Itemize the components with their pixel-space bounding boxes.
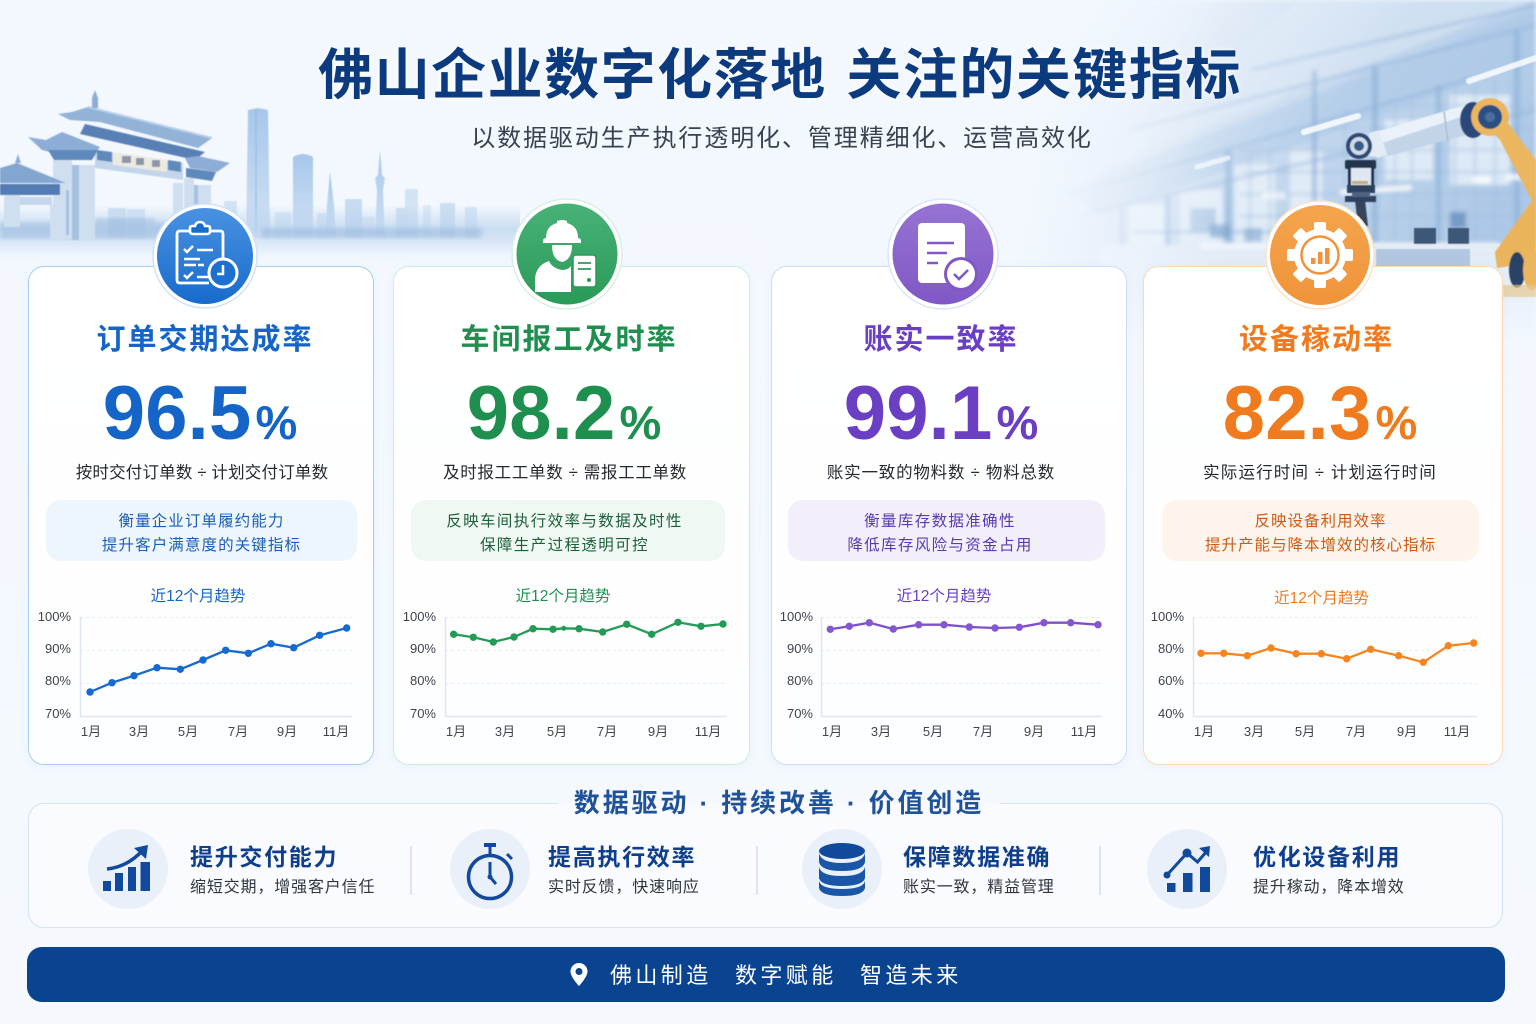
heading: 账实一致率: [863, 324, 1019, 356]
slogan: 数字赋能: [735, 963, 837, 988]
description callout: 提升产能与降本增效的核心指标: [1205, 536, 1436, 554]
line chart: workshop reporting trend: 100%: [403, 609, 436, 624]
line chart: inventory accuracy trend: 1月: [822, 724, 842, 739]
panel: equipment availability rate: [1143, 200, 1503, 765]
Foshan skyline silhouette: [108, 108, 477, 239]
line chart: equipment availability trend: 40%: [1158, 706, 1184, 721]
line chart: order delivery trend: 100%: [38, 609, 71, 624]
factory hall background: [1072, 0, 1536, 308]
metric value: 96.5%: [103, 371, 297, 456]
line chart: workshop reporting trend: 70%: [410, 706, 436, 721]
chart title: 近12个月趋势: [897, 588, 991, 605]
line chart: order delivery trend: 90%: [45, 641, 71, 656]
panel: value summary: [28, 803, 1503, 928]
summary heading: 数据驱动 · 持续改善 · 价值创造: [574, 788, 984, 818]
icon: location pin: [570, 963, 588, 986]
benefit: delivery capability: 缩短交期，增强客户信任: [190, 879, 375, 896]
line chart: workshop reporting trend: 90%: [410, 641, 436, 656]
line chart: inventory accuracy trend: 5月: [923, 724, 943, 739]
line chart: workshop reporting trend: 1月: [446, 724, 466, 739]
line chart: workshop reporting trend: 80%: [410, 673, 436, 688]
line chart: order delivery trend: 3月: [129, 724, 149, 739]
icon: gear with bars: [1265, 200, 1375, 310]
description callout: 反映车间执行效率与数据及时性: [446, 513, 683, 530]
line chart: inventory accuracy trend: 3月: [871, 724, 891, 739]
benefit: delivery capability: [88, 829, 375, 909]
description callout: [1162, 500, 1479, 561]
line chart: inventory accuracy trend: 70%: [787, 706, 813, 721]
line chart: equipment availability trend: 80%: [1158, 641, 1184, 656]
line chart: inventory accuracy trend: 100%: [780, 609, 813, 624]
Foshan memorial archway: [0, 90, 230, 240]
chart title: 近12个月趋势: [151, 588, 245, 605]
icon: database: [802, 829, 882, 909]
slogan: 佛山制造: [610, 963, 712, 988]
description callout: 衡量库存数据准确性: [864, 513, 1016, 530]
description callout: 提升客户满意度的关键指标: [102, 536, 301, 554]
subtitle: 以数据驱动生产执行透明化、管理精细化、运营高效化: [471, 125, 1093, 152]
line chart: workshop reporting trend: 7月: [597, 724, 617, 739]
benefit: equipment utilization: 提升稼动，降本增效: [1253, 879, 1405, 896]
description callout: 保障生产过程透明可控: [480, 536, 649, 554]
benefit: data accuracy: 保障数据准确: [903, 844, 1051, 870]
description callout: 反映设备利用效率: [1254, 513, 1386, 530]
description callout: [411, 500, 725, 561]
panel: workshop reporting rate: [393, 198, 750, 765]
metric value: 98.2%: [467, 371, 661, 456]
metric value: 99.1%: [844, 371, 1038, 456]
title: 佛山企业数字化落地 关注的关键指标: [318, 44, 1242, 106]
line chart: inventory accuracy trend: [780, 609, 1102, 739]
benefit: equipment utilization: 优化设备利用: [1253, 844, 1401, 870]
icon: worker with hard hat: [511, 198, 623, 310]
panel: order delivery rate: [28, 204, 374, 765]
slogan: [610, 963, 962, 988]
panel: inventory accuracy rate: [771, 198, 1127, 765]
formula: 按时交付订单数 ÷ 计划交付订单数: [76, 464, 328, 482]
icon: stopwatch: [450, 829, 530, 909]
line chart: equipment availability trend: 11月: [1444, 724, 1470, 739]
ceiling light strips: [1197, 58, 1536, 167]
metric value: 82.3%: [1223, 371, 1417, 456]
heading: 车间报工及时率: [460, 324, 678, 356]
line chart: equipment availability trend: 60%: [1158, 673, 1184, 688]
line chart: workshop reporting trend: [403, 609, 727, 739]
line chart: equipment availability trend: 9月: [1397, 724, 1417, 739]
line chart: workshop reporting trend: 5月: [547, 724, 567, 739]
line chart: inventory accuracy trend: 7月: [973, 724, 993, 739]
line chart: workshop reporting trend: 11月: [695, 724, 721, 739]
line chart: order delivery trend: 80%: [45, 673, 71, 688]
line chart: inventory accuracy trend: 9月: [1024, 724, 1044, 739]
line chart: equipment availability trend: [1151, 609, 1478, 739]
line chart: inventory accuracy trend: 80%: [787, 673, 813, 688]
description callout: 降低库存风险与资金占用: [847, 536, 1033, 554]
line chart: inventory accuracy trend: 11月: [1071, 724, 1097, 739]
line chart: equipment availability trend: 3月: [1244, 724, 1264, 739]
line chart: order delivery trend: 5月: [178, 724, 198, 739]
formula: 实际运行时间 ÷ 计划运行时间: [1203, 464, 1437, 482]
icon: bars with trend line: [1147, 829, 1227, 909]
description callout: 衡量企业订单履约能力: [118, 513, 284, 530]
formula: 账实一致的物料数 ÷ 物料总数: [827, 464, 1055, 482]
line chart: equipment availability trend: 7月: [1346, 724, 1366, 739]
line chart: equipment availability trend: 5月: [1295, 724, 1315, 739]
line chart: order delivery trend: 11月: [323, 724, 349, 739]
benefit: execution efficiency: [450, 829, 700, 909]
benefit: execution efficiency: 实时反馈，快速响应: [548, 879, 700, 896]
benefit: delivery capability: 提升交付能力: [190, 844, 338, 870]
line chart: workshop reporting trend: 3月: [495, 724, 515, 739]
line chart: equipment availability trend: 100%: [1151, 609, 1184, 624]
benefit: data accuracy: [802, 829, 1055, 909]
benefit: execution efficiency: 提高执行效率: [548, 844, 696, 870]
line chart: order delivery trend: 1月: [81, 724, 101, 739]
benefit: equipment utilization: [1147, 829, 1405, 909]
description callout: [46, 500, 357, 561]
line chart: equipment availability trend: 1月: [1194, 724, 1214, 739]
line chart: order delivery trend: [38, 609, 352, 739]
river mist and tree line: [0, 205, 520, 267]
background scene: factory and Foshan skyline: [0, 0, 1536, 310]
heading: 设备稼动率: [1239, 324, 1394, 356]
line chart: inventory accuracy trend: 90%: [787, 641, 813, 656]
line chart: order delivery trend: 70%: [45, 706, 71, 721]
line chart: order delivery trend: 7月: [228, 724, 248, 739]
icon: document with check mark: [887, 198, 999, 310]
chart title: 近12个月趋势: [516, 588, 610, 605]
description callout: [788, 500, 1105, 561]
chart title: 近12个月趋势: [1274, 590, 1369, 607]
robot arm: [1345, 98, 1536, 297]
line chart: workshop reporting trend: 9月: [648, 724, 668, 739]
benefit: data accuracy: 账实一致，精益管理: [903, 879, 1055, 896]
heading: 订单交期达成率: [96, 324, 314, 356]
icon: rising bars with arrow: [88, 829, 168, 909]
footer banner: [27, 947, 1505, 1002]
line chart: order delivery trend: 9月: [277, 724, 297, 739]
icon: clipboard with clock: [152, 204, 258, 309]
formula: 及时报工工单数 ÷ 需报工工单数: [443, 464, 687, 482]
slogan: 智造未来: [860, 963, 962, 988]
